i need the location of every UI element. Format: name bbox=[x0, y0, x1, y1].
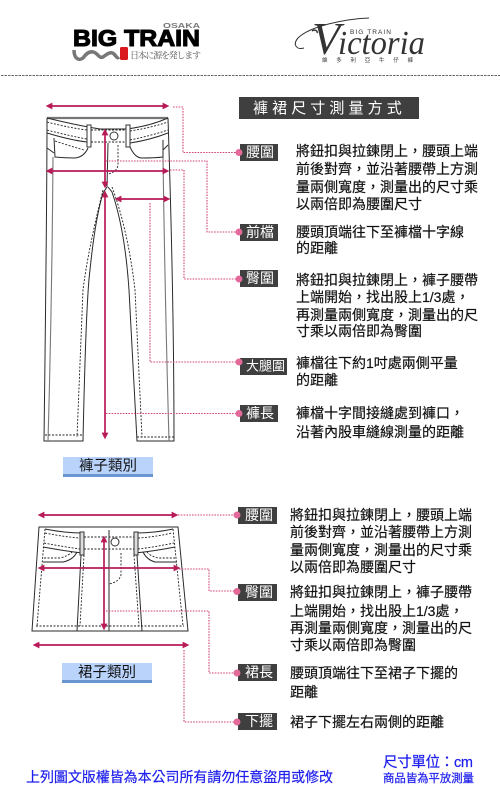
row: skirt hip: 臀圍 bbox=[245, 584, 273, 600]
logo: Victoria: V bbox=[312, 13, 345, 64]
arrow: skirt waist bbox=[41, 514, 175, 516]
row: pants hip bbox=[236, 270, 478, 339]
row: pants waist: 將鈕扣與拉鍊閉上，腰頭上端 bbox=[296, 143, 478, 159]
row: skirt length: 距離 bbox=[290, 684, 318, 700]
row: pants waist: 腰圍 bbox=[246, 144, 274, 160]
row: pants front rise: 的距離 bbox=[296, 240, 338, 256]
row: pants hip: 臀圍 bbox=[246, 270, 274, 286]
label: pants category: 褲子類別 bbox=[79, 458, 137, 474]
row: pants thigh bbox=[236, 355, 458, 388]
arrow: skirt length bbox=[103, 539, 105, 627]
row: pants thigh: 褲檔往下約1吋處兩側平量 bbox=[296, 355, 458, 371]
connector: thigh bbox=[150, 203, 238, 362]
row: pants front rise: 腰頭頂端往下至褲檔十字線 bbox=[296, 224, 464, 240]
row: pants length bbox=[236, 405, 464, 440]
logo: Victoria bbox=[295, 13, 425, 64]
row: skirt length: 裙長 bbox=[245, 664, 273, 680]
row: pants thigh: 大腿圍 bbox=[246, 358, 285, 374]
footer: units note: 尺寸單位：cm bbox=[383, 754, 473, 771]
row: pants front rise bbox=[236, 224, 464, 256]
label: pants category bbox=[63, 457, 153, 477]
logo: Victoria: BIG TRAIN bbox=[350, 29, 391, 36]
footer: units note: 商品皆為平放測量 bbox=[383, 771, 474, 785]
logo: Big Train bbox=[73, 21, 201, 60]
row: skirt hip: 上端開始，找出股上1/3處， bbox=[290, 603, 463, 619]
row: skirt hip: 再測量兩側寬度，測量出的尺 bbox=[290, 620, 472, 636]
heading: measurement methods: 褲裙尺寸測量方式 bbox=[253, 100, 406, 117]
row: skirt hip: 寸乘以兩倍即為臀圍 bbox=[290, 637, 416, 653]
row: pants hip: 將鈕扣與拉鍊閉上，褲子腰帶 bbox=[296, 272, 478, 288]
row: pants waist: 前後對齊，並沿著腰帶上方測 bbox=[296, 161, 478, 177]
connector: waist bbox=[173, 107, 238, 152]
connector: skirt hip bbox=[179, 569, 237, 591]
connector: skirt length bbox=[106, 611, 237, 673]
row: skirt waist bbox=[234, 507, 472, 575]
arrow: hip bbox=[49, 170, 166, 172]
row: skirt hem bbox=[234, 713, 444, 730]
row: skirt waist: 腰圍 bbox=[245, 507, 273, 523]
heading: measurement methods bbox=[239, 97, 419, 119]
connector: skirt hem bbox=[184, 650, 237, 722]
label: skirt category bbox=[62, 663, 152, 683]
row: skirt length bbox=[234, 664, 458, 700]
row: pants hip: 再測量兩側寬度，測量出的尺 bbox=[296, 307, 478, 323]
row: skirt waist: 量兩側寬度，測量出的尺寸乘 bbox=[290, 542, 472, 558]
row: pants waist: 量兩側寬度，測量出的尺寸乘 bbox=[296, 179, 478, 195]
skirt diagram bbox=[32, 515, 237, 722]
connector: length bbox=[106, 412, 238, 414]
row: skirt length: 腰頭頂端往下至裙子下擺的 bbox=[290, 665, 458, 681]
row: pants waist bbox=[236, 143, 478, 212]
connector: skirt waist bbox=[178, 514, 237, 516]
row: skirt hem: 裙子下擺左右兩側的距離 bbox=[290, 714, 444, 730]
row: pants front rise: 前檔 bbox=[246, 224, 274, 240]
logo: Victoria: 維多利亞牛仔褲 bbox=[322, 56, 413, 64]
connector: hip bbox=[170, 170, 238, 279]
pants diagram bbox=[44, 106, 238, 441]
row: pants waist: 以兩倍即為腰圍尺寸 bbox=[296, 196, 422, 212]
row: skirt waist: 以兩倍即為腰圍尺寸 bbox=[290, 559, 416, 575]
row: pants thigh: 的距離 bbox=[296, 372, 338, 388]
row: pants length: 沿著內股車縫線測量的距離 bbox=[296, 424, 464, 440]
row: pants hip: 寸乘以兩倍即為臀圍 bbox=[296, 323, 422, 339]
skirt outline bbox=[32, 527, 188, 631]
row: skirt waist: 將鈕扣與拉鍊閉上，腰頭上端 bbox=[290, 507, 472, 523]
row: skirt hip bbox=[234, 584, 472, 653]
arrow: front rise bbox=[104, 132, 106, 185]
label: skirt category: 裙子類別 bbox=[78, 664, 136, 681]
row: skirt hip: 將鈕扣與拉鍊閉上，褲子腰帶 bbox=[290, 584, 472, 600]
arrow: skirt hip bbox=[41, 567, 177, 569]
row: skirt hem: 下擺 bbox=[245, 713, 273, 729]
arrow: skirt hem bbox=[36, 644, 186, 646]
pants outline bbox=[44, 118, 174, 441]
connector: front rise bbox=[106, 161, 238, 232]
logo: Victoria: ictoria bbox=[338, 25, 425, 62]
row: pants length: 褲長 bbox=[246, 405, 274, 421]
arrow: waist bbox=[49, 105, 166, 107]
logo: Big Train: 日本に源を発します bbox=[130, 50, 201, 60]
logo: Big Train: OSAKA bbox=[163, 21, 201, 30]
row: pants length: 褲檔十字間接縫處到褲口， bbox=[296, 405, 464, 421]
arrow: thigh bbox=[118, 198, 167, 200]
header divider bbox=[1, 74, 500, 76]
logo: Big Train: BIG TRAIN bbox=[73, 25, 200, 51]
footer: units note bbox=[383, 754, 474, 785]
row: pants hip: 上端開始，找出股上1/3處， bbox=[296, 289, 469, 305]
row: skirt waist: 前後對齊，並沿著腰帶上方測 bbox=[290, 524, 472, 540]
footer: copyright notice: 上列圖文版權皆為本公司所有請勿任意盜用或修改 bbox=[26, 769, 333, 785]
arrow: inseam bbox=[104, 194, 106, 436]
